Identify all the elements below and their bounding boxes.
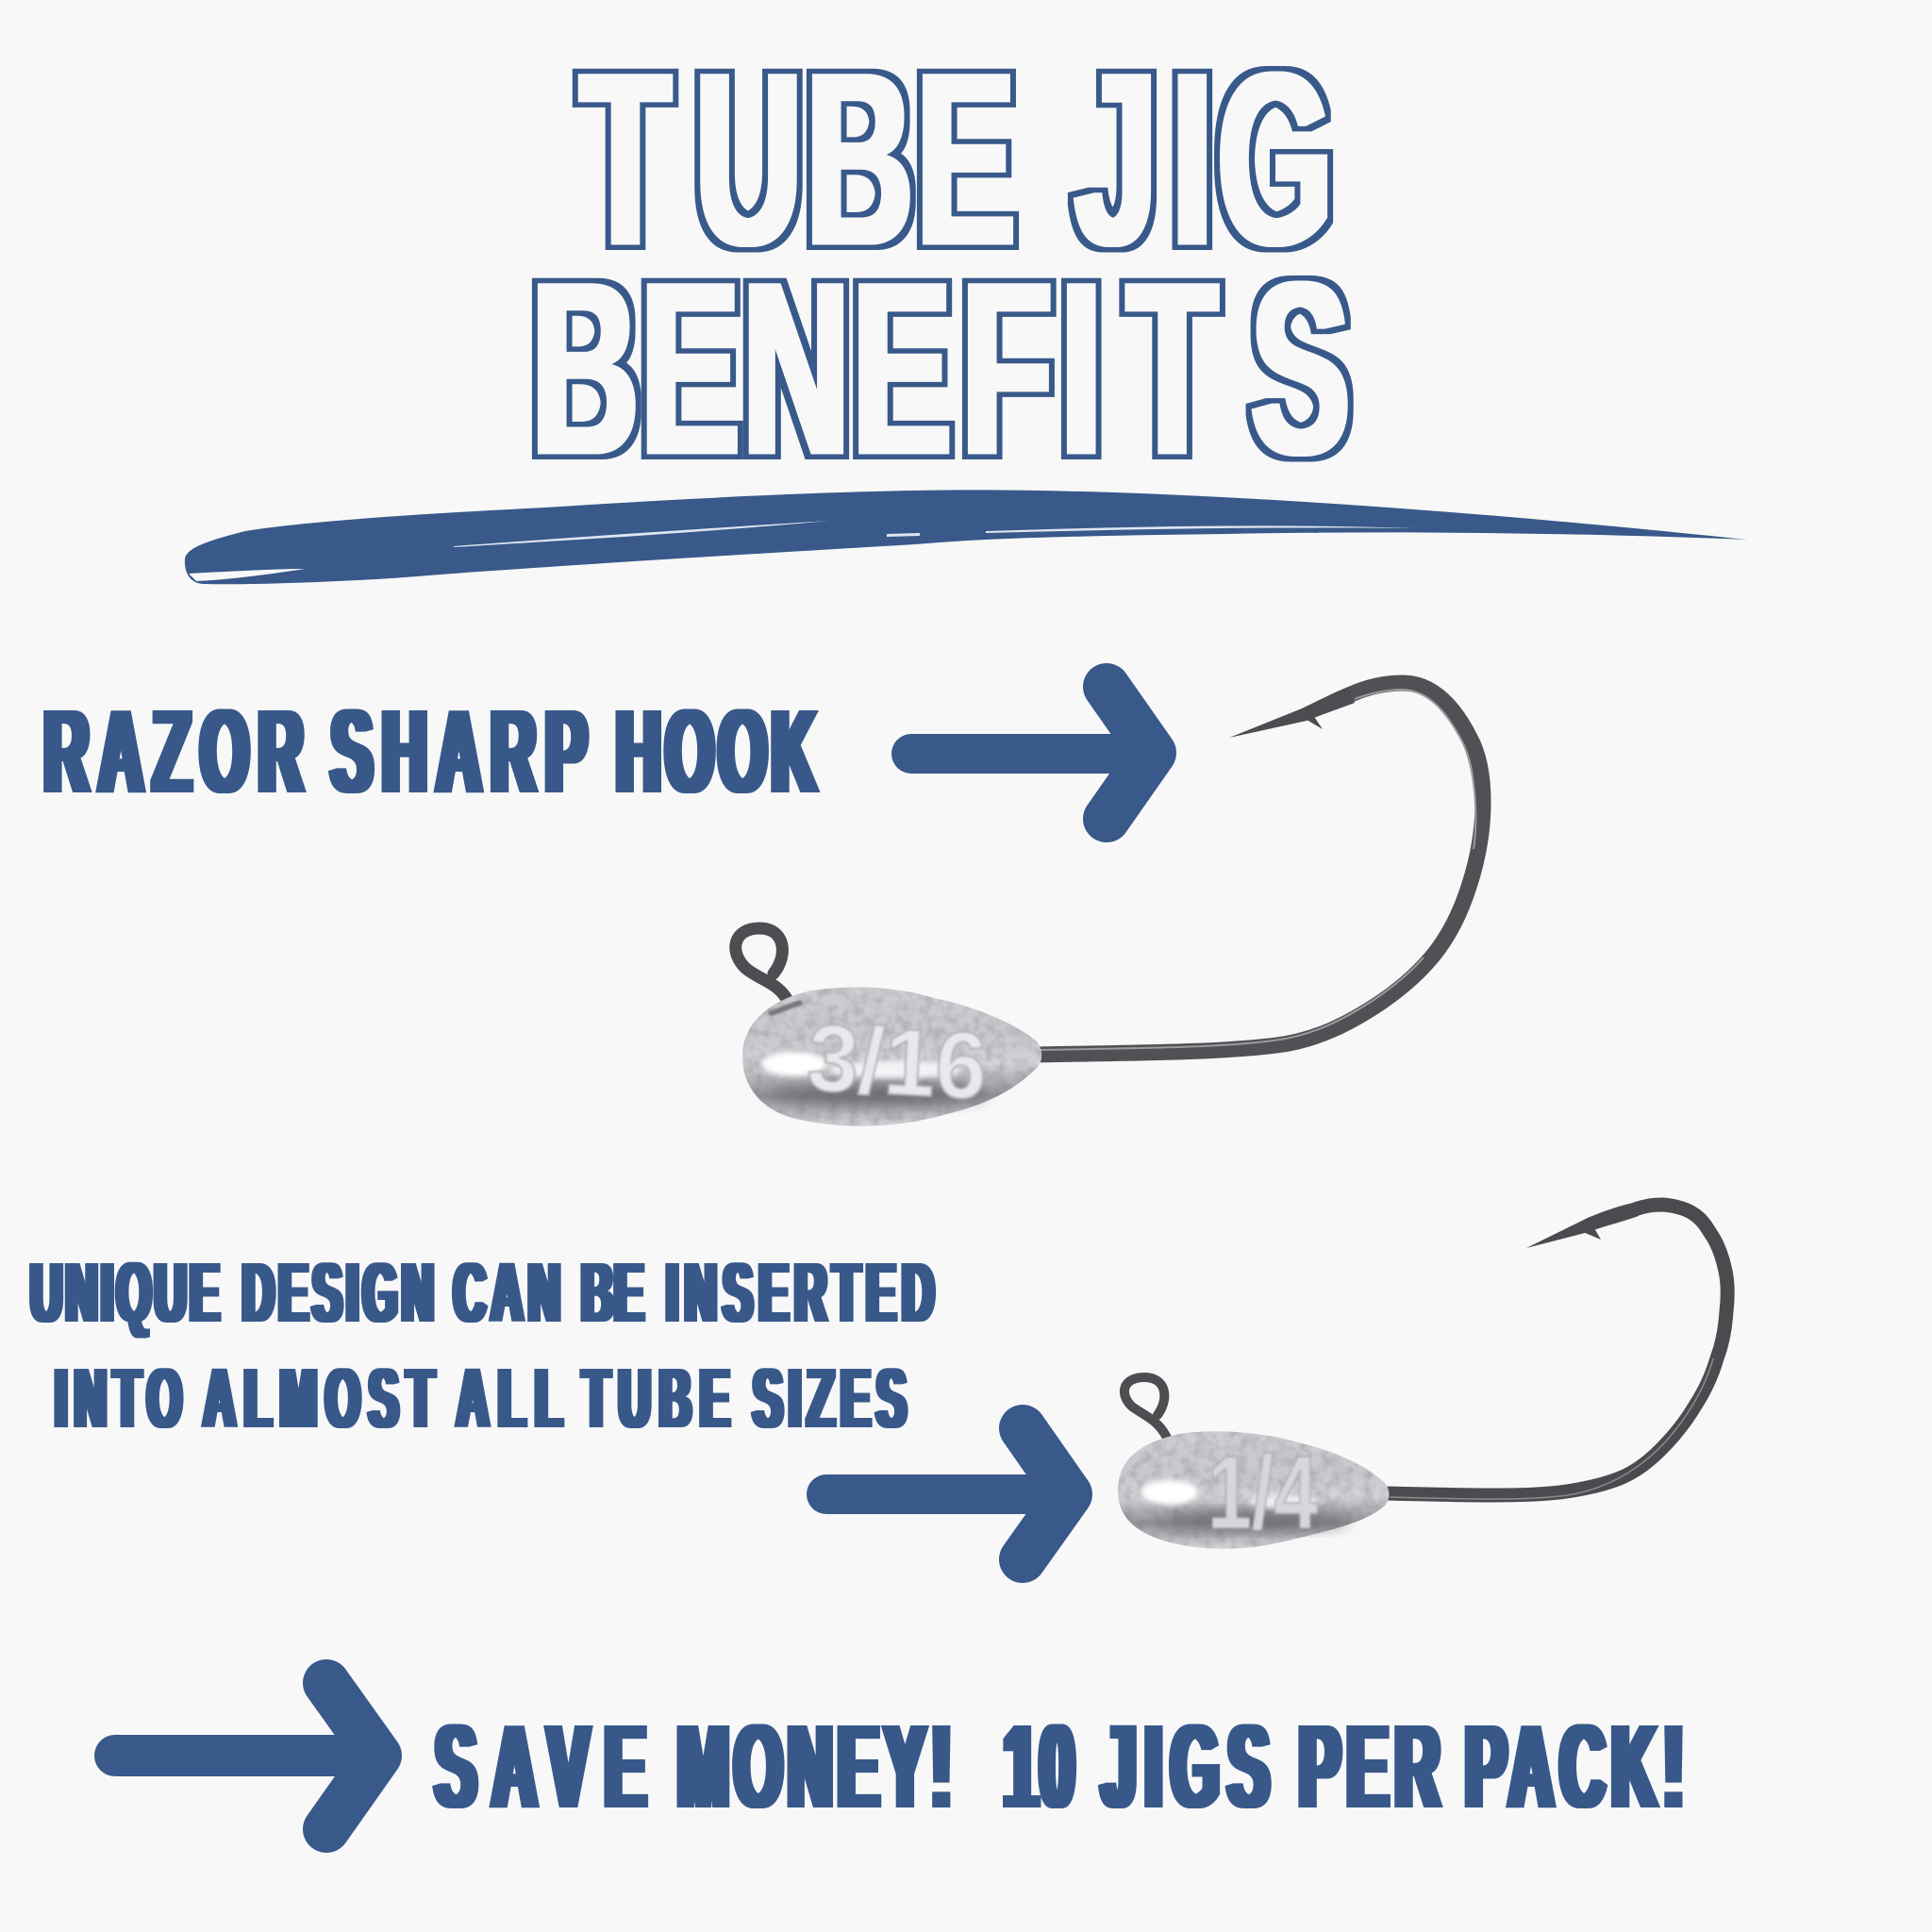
embossed size: 3/16: 3/16 (805, 1005, 990, 1120)
lead shading (1141, 1480, 1349, 1528)
text: razor sharp hook: HOOK (616, 686, 821, 819)
text: save money: 10 (1004, 1701, 1095, 1834)
brush stroke underline (185, 490, 1747, 584)
line 1: CAN (454, 1246, 583, 1341)
hook point and barb (1229, 687, 1355, 738)
line 2: INTO (55, 1352, 208, 1446)
title (531, 20, 1350, 507)
line 1: BE (581, 1246, 658, 1341)
text: razor sharp hook: RAZOR (44, 686, 340, 819)
line 1: DESIGN (242, 1246, 455, 1341)
lead head (742, 987, 1041, 1126)
text: razor sharp hook: SHARP (331, 686, 623, 819)
text: save money: SAVE (435, 1701, 694, 1834)
line 2: TUBE (583, 1352, 759, 1446)
lead head (1118, 1431, 1389, 1549)
hook wire (1033, 683, 1483, 1055)
text: save money: PACK! (1465, 1701, 1690, 1834)
lead shading (762, 1002, 986, 1103)
embossed size: 1/4: 1/4 (1208, 1435, 1318, 1551)
jig photo: 1/4 (1118, 1203, 1727, 1551)
text: save money: MONEY! (677, 1701, 1002, 1834)
text: save money: PER (1299, 1701, 1471, 1834)
arrow: to hook point (911, 687, 1153, 819)
line eye (736, 928, 791, 1006)
text: save money (435, 1701, 1690, 1834)
text: save money: JIGS (1102, 1701, 1304, 1834)
hook wire (1385, 1205, 1727, 1499)
line eye (1124, 1377, 1168, 1440)
line 1: INSERTED (666, 1246, 941, 1341)
line 1: UNIQUE (30, 1246, 239, 1341)
arrow: to savings text (115, 1683, 378, 1829)
hook point and barb (1526, 1203, 1639, 1248)
title line: benefits: BENEFITS (531, 229, 1350, 507)
title line: tube jig: TUBE JIG (580, 20, 1333, 297)
arrow: to jig head (826, 1428, 1069, 1559)
text: unique design (30, 1246, 941, 1446)
jig photo: 3/16 (736, 683, 1483, 1126)
text: razor sharp hook (44, 686, 821, 819)
line 2: SIZES (753, 1352, 912, 1446)
line 2: ALMOST (204, 1352, 464, 1446)
line 2: ALL (457, 1352, 593, 1446)
